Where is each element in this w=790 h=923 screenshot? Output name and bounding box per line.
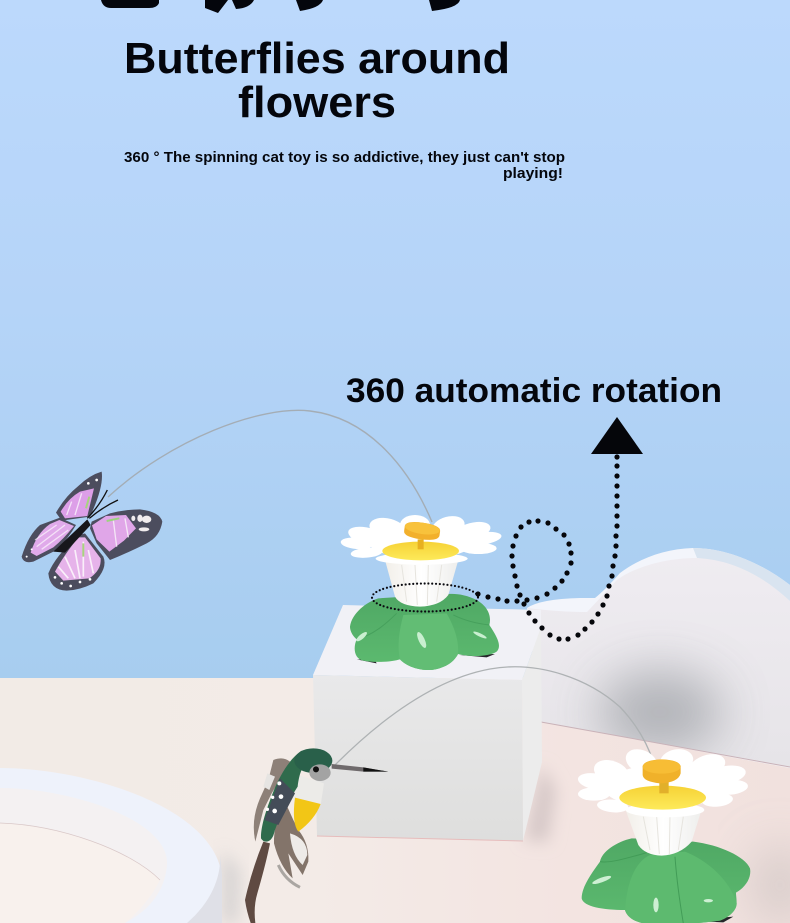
front lobe bbox=[399, 613, 458, 670]
cup bbox=[385, 560, 458, 607]
dotted motion path bbox=[475, 454, 620, 642]
lip bbox=[376, 553, 468, 565]
title: Butterflies around bbox=[124, 34, 510, 83]
petals bbox=[340, 513, 502, 559]
icon: purple butterfly bbox=[22, 472, 162, 591]
body bbox=[53, 519, 91, 553]
title: flowers bbox=[238, 78, 396, 127]
green body bbox=[261, 751, 307, 842]
dark spotted wing bbox=[264, 778, 295, 825]
white cube bbox=[313, 605, 542, 841]
right wing bbox=[90, 509, 162, 560]
lower left wing bbox=[22, 518, 76, 562]
white edge spots bbox=[26, 479, 135, 587]
floor shadows bbox=[222, 765, 790, 923]
hummingbird wire bbox=[335, 667, 655, 767]
white ring on the floor bbox=[0, 768, 222, 923]
upper left wing bbox=[56, 472, 102, 521]
butterfly wire bbox=[108, 410, 432, 522]
white arch backdrop bbox=[527, 548, 790, 768]
subtitle: 360 ° The spinning cat toy is so addictive, they just can't stop bbox=[124, 149, 565, 166]
yellow dome bbox=[619, 786, 706, 810]
base lobe creases bbox=[600, 853, 683, 923]
orange cap bbox=[643, 759, 681, 783]
bottom wing bbox=[48, 533, 105, 591]
subtitle bbox=[124, 149, 565, 182]
base gloss highlights bbox=[355, 630, 487, 649]
base lobe creases bbox=[357, 613, 489, 639]
base foot shadow bbox=[687, 917, 733, 922]
front lobe bbox=[625, 852, 737, 923]
stem bbox=[418, 539, 424, 549]
lip bbox=[626, 803, 704, 817]
back wing feathers bbox=[254, 758, 290, 842]
blue wall background bbox=[0, 0, 790, 680]
yellow dome bbox=[382, 542, 459, 560]
flower toy on cube bbox=[340, 513, 502, 670]
base gloss highlights bbox=[591, 874, 713, 912]
subtitle: playing! bbox=[503, 165, 563, 182]
title bbox=[124, 34, 510, 127]
green base bbox=[350, 594, 499, 670]
head bbox=[294, 748, 332, 773]
beak bbox=[332, 764, 388, 772]
petals bbox=[577, 744, 749, 814]
cup bbox=[626, 809, 702, 856]
base foot shadows bbox=[357, 654, 495, 663]
yellow bib bbox=[294, 798, 321, 832]
lower feathers bbox=[274, 802, 308, 878]
white underside bbox=[293, 775, 324, 805]
rotation label: 360 automatic rotation bbox=[346, 372, 722, 410]
green base bbox=[582, 838, 750, 923]
floor bbox=[0, 678, 790, 923]
icon: hummingbird bbox=[245, 748, 388, 923]
antennae bbox=[87, 490, 118, 518]
flower toy on floor bbox=[577, 744, 750, 923]
arrow head bbox=[591, 417, 643, 454]
orange cap bbox=[403, 520, 441, 542]
dotted orbit ellipse bbox=[372, 584, 478, 612]
clipped heading fragments at top bbox=[101, 0, 460, 13]
stem bbox=[659, 780, 669, 793]
tail feather bbox=[245, 842, 270, 923]
